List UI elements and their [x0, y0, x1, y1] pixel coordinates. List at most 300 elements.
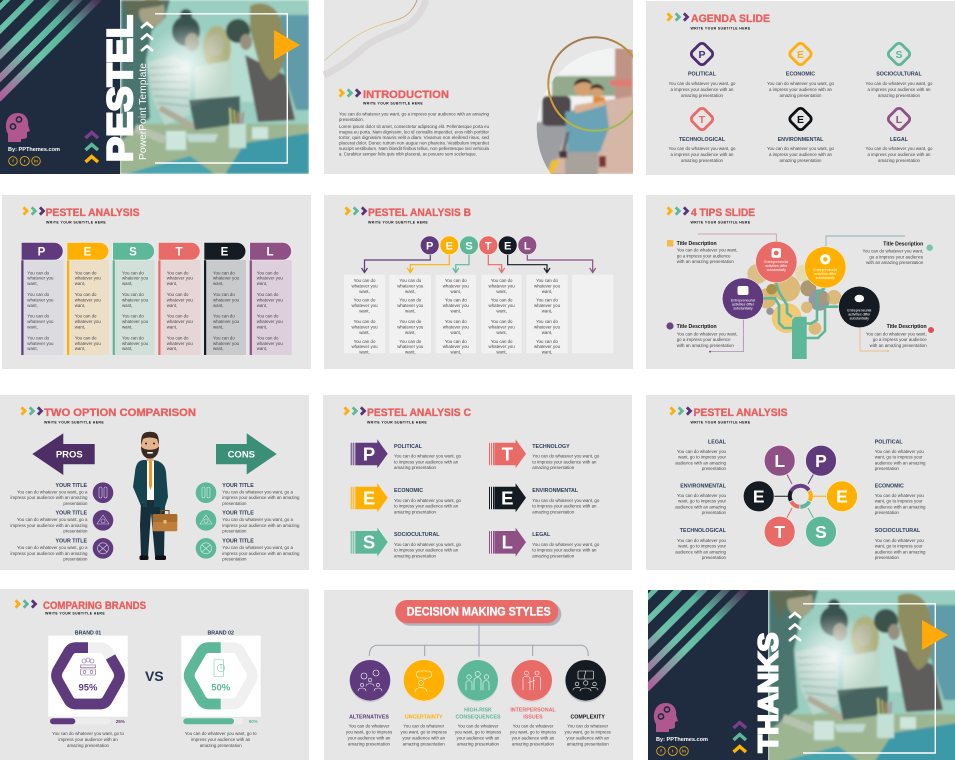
subtitle: WRITE YOUR SUBTITLE HERE	[690, 420, 751, 424]
column P: whatever you	[27, 276, 54, 281]
text cards: You can do	[491, 298, 513, 302]
style: interpersonal issues: amazing presentation	[512, 742, 555, 747]
icon: chevrons	[668, 207, 688, 215]
column S: whatever you	[122, 341, 149, 346]
arrow item: political: P	[363, 443, 375, 464]
column L: You can do	[257, 292, 279, 297]
title: TWO OPTION COMPARISON	[44, 407, 196, 419]
column E environmental: E	[221, 246, 229, 258]
icon: chevrons	[670, 407, 690, 415]
title: 4 TIPS SLIDE	[691, 207, 755, 219]
text cards: want,	[451, 289, 461, 294]
column E environmental: You can do	[213, 292, 235, 297]
icon: chevrons	[22, 407, 42, 415]
tip text: top right: You can do whatever you want,	[862, 249, 923, 254]
tip text: bottom left: You can do whatever you want,	[677, 331, 738, 336]
style: high-risk consequences: HIGH-RISK	[464, 707, 492, 713]
pros items	[10, 482, 113, 562]
column P: You can do	[27, 314, 50, 319]
column E environmental: whatever you	[213, 297, 240, 302]
column T: whatever you	[167, 297, 193, 302]
text cards: whatever you	[489, 344, 515, 349]
text cards: want,	[405, 330, 416, 335]
item: political: amazing presentation	[681, 93, 724, 98]
tip circle: coral: activities differ	[765, 264, 788, 268]
text cards: want,	[405, 308, 416, 313]
brand 02 description: impress your audience with an	[191, 737, 251, 742]
item: political: POLITICAL	[688, 71, 717, 77]
column L: You can do	[257, 335, 279, 340]
column L: want,	[257, 281, 267, 286]
column P: You can do	[27, 335, 50, 340]
column S: You can do	[122, 292, 144, 297]
column P: whatever you	[27, 297, 54, 302]
cons items: You can do whatever you want, go a	[222, 517, 293, 522]
column P: want,	[27, 346, 38, 351]
column L: whatever you	[257, 276, 283, 281]
left labels: You can do whatever you	[677, 538, 727, 543]
panel: 4 tips slide	[646, 195, 955, 369]
text cards: You can do	[354, 298, 376, 302]
item: environmental: You can do whatever you want, go	[767, 146, 835, 151]
panel: decision making styles	[324, 590, 633, 760]
letters: P	[426, 240, 433, 252]
connector tree	[369, 623, 588, 657]
item: environmental: amazing presentation	[780, 158, 822, 163]
arrow item: technology: amazing presentation	[532, 465, 575, 470]
title: PESTEL ANALYSIS B	[368, 207, 471, 219]
text cards: whatever you	[351, 324, 378, 329]
text cards: want,	[451, 330, 461, 335]
cons items	[196, 482, 300, 562]
style: high-risk consequences: you want, go to impress	[455, 730, 502, 735]
body text: presentation.	[339, 117, 364, 122]
tip text: bottom right: with an amazing presentation	[870, 343, 927, 348]
item: environmental: a impress your audience with an	[769, 152, 833, 157]
progress bar: brand 02: 90%	[249, 719, 258, 724]
letters: E	[504, 240, 511, 252]
right labels: audience with an amazing	[875, 549, 926, 554]
panel: PESTEL analysis B	[324, 195, 633, 369]
text cards: You can do	[445, 319, 467, 324]
text cards: whatever you	[489, 303, 515, 308]
radial diagram	[743, 445, 857, 547]
pros items: You can do whatever you want, go a	[17, 489, 88, 494]
brand 02 card: BRAND 02	[207, 630, 234, 636]
column E: want,	[75, 346, 85, 351]
subtitle: WRITE YOUR SUBTITLE HERE	[46, 220, 106, 224]
pros items: YOUR TITLE	[56, 483, 87, 489]
tip text: bottom right	[866, 324, 934, 348]
right labels: You can do whatever you	[875, 538, 924, 543]
pros items: YOUR TITLE	[56, 538, 87, 544]
column E	[67, 242, 109, 355]
column E: whatever you	[75, 276, 101, 281]
column L: L	[266, 246, 274, 258]
style: alternatives: ALTERNATIVES	[349, 714, 389, 720]
arrow item: economic: You can do whatever you want, go	[394, 498, 462, 503]
left labels: TECHNOLOGICAL	[680, 528, 727, 534]
arrow item: environmental: ENVIRONMENTAL	[532, 488, 579, 494]
item: economic	[767, 42, 835, 98]
panel: agenda slide	[646, 1, 955, 175]
pros items: You can do whatever you want, go a	[17, 517, 88, 522]
arrow item: economic: amazing presentation	[394, 509, 437, 514]
left labels: audience with an amazing	[675, 504, 727, 509]
title: COMPARING BRANDS	[43, 600, 146, 612]
arrow item: legal: amazing presentation	[532, 553, 575, 558]
brand 02 description: amazing presentation	[200, 743, 242, 748]
subtitle: WRITE YOUR SUBTITLE HERE	[690, 26, 751, 30]
radial diagram: T	[774, 522, 785, 542]
text cards: You can do	[354, 319, 376, 324]
pros items: impress your audience with an amazing	[10, 495, 88, 500]
subtitle: WRITE YOUR SUBTITLE HERE	[367, 420, 427, 424]
progress bar: brand 01: 25%	[116, 719, 125, 724]
column E: whatever you	[75, 341, 101, 346]
item: sociocultural: You can do whatever you want, go	[866, 81, 933, 86]
right labels: presentation	[875, 555, 899, 560]
arrow: pros: PROS	[56, 449, 83, 460]
text cards: whatever you	[443, 324, 469, 329]
style: interpersonal issues: you want, go to impress	[510, 730, 557, 735]
item: legal: amazing presentation	[878, 158, 921, 163]
column P: whatever you	[27, 319, 54, 324]
ring	[548, 37, 642, 131]
left labels: ENVIRONMENTAL	[680, 484, 727, 490]
cons items: You can do whatever you want, go a	[222, 545, 293, 550]
tip text: top left: go a impress your audience	[677, 253, 731, 258]
text cards: You can do	[536, 298, 558, 302]
pros items: impress your audience with an amazing	[10, 551, 88, 556]
text cards: whatever you	[534, 344, 561, 349]
column S	[113, 242, 155, 355]
column L: want,	[257, 346, 267, 351]
panel: thanks slide	[646, 587, 955, 760]
arrow item: political: to impress your audience with an	[394, 459, 459, 464]
text cards: whatever you	[489, 324, 515, 329]
column E: want,	[75, 281, 85, 286]
cons items: presentation	[222, 557, 247, 562]
cons items: You can do whatever you want, go a	[222, 489, 293, 494]
tip circle: purple	[722, 278, 764, 319]
icon: chevrons	[346, 207, 366, 215]
style: alternatives: You can do whatever	[349, 724, 390, 729]
right labels: You can do whatever you	[875, 493, 924, 498]
arrow item: technology: You can do whatever you want, go	[532, 454, 600, 459]
tip text: bottom right: You can do whatever you want,	[866, 331, 927, 336]
text cards: whatever you	[351, 303, 378, 308]
style: uncertainty: You can do whatever	[403, 724, 445, 729]
column T: want,	[167, 324, 177, 330]
tip circle: yellow: activities differ	[814, 272, 837, 276]
arrow: cons	[216, 433, 277, 474]
style: interpersonal issues	[510, 660, 557, 747]
item: technological: amazing presentation	[681, 158, 724, 163]
arrow: cons: CONS	[228, 449, 255, 460]
column L: whatever you	[257, 319, 283, 324]
social icons	[12, 159, 38, 164]
brand 01 description: You can do whatever you want, go to	[52, 731, 124, 736]
column P: whatever you	[27, 341, 54, 346]
subtitle: WRITE YOUR SUBTITLE HERE	[363, 102, 423, 106]
text cards: want,	[359, 330, 370, 335]
column T	[158, 242, 200, 355]
column P	[21, 242, 63, 355]
text cards: want,	[451, 308, 461, 313]
cons items: impress your audience with an amazing	[222, 495, 300, 500]
brand 01 description: impress your audience with an	[58, 737, 118, 742]
item: sociocultural: SOCIOCULTURAL	[876, 71, 923, 77]
letters: T	[485, 240, 492, 252]
column E environmental: want,	[213, 346, 224, 351]
tip circle: coral	[756, 241, 797, 283]
text cards: You can do	[399, 298, 422, 302]
style: complexity: you want, go to impress	[565, 730, 612, 735]
item: environmental: ENVIRONMENTAL	[778, 137, 824, 143]
arrow item: political	[351, 439, 462, 470]
column P: P	[38, 246, 46, 258]
title: AGENDA SLIDE	[691, 13, 770, 25]
text cards: whatever you	[397, 344, 424, 349]
item: environmental	[767, 107, 835, 163]
letters: L	[524, 240, 531, 252]
letters: S	[465, 240, 473, 252]
text cards: whatever you	[397, 283, 424, 288]
item: sociocultural	[866, 42, 933, 98]
column P: want,	[27, 324, 38, 330]
arrow item: political: amazing presentation	[394, 465, 437, 470]
progress bar: brand 01	[50, 718, 125, 724]
tip text: bottom left: with an amazing presentation	[677, 343, 734, 348]
column E environmental: whatever you	[213, 276, 240, 281]
left labels: want, go to impress your	[678, 455, 727, 460]
right labels: presentation	[875, 510, 899, 515]
arrow item: sociocultural: S	[363, 532, 375, 553]
right labels: audience with an amazing	[875, 504, 926, 509]
left labels: presentation	[702, 466, 727, 471]
subtitle: PowerPoint Template: PowerPoint Template	[137, 63, 149, 160]
text cards: You can do	[445, 339, 467, 344]
text cards: whatever you	[351, 283, 378, 288]
radial diagram: L	[774, 451, 785, 471]
right labels: ECONOMIC	[875, 484, 904, 490]
illustration: businessman	[133, 432, 177, 560]
text cards: You can do	[491, 339, 513, 344]
panel: PESTEL analysis C	[323, 395, 632, 570]
subtitle: WRITE YOUR SUBTITLE HERE	[45, 611, 105, 615]
photo: father and child	[536, 36, 633, 174]
text cards: You can do	[536, 319, 558, 324]
text cards: You can do	[354, 278, 376, 283]
column S: You can do	[122, 270, 144, 275]
title: PESTEL ANALYSIS C	[367, 407, 471, 419]
tip text: top right: Title Description	[883, 241, 923, 247]
column E environmental: want,	[213, 303, 224, 308]
arrow item: environmental: E	[501, 487, 513, 508]
tip text: top left: Title Description	[677, 241, 717, 247]
arrow item: legal: You can do whatever you want, go	[532, 542, 600, 547]
column S: want,	[122, 324, 132, 330]
panel: introduction slide	[324, 0, 642, 180]
text cards: want,	[496, 289, 507, 294]
arrow item: technology: TECHNOLOGY	[532, 444, 570, 450]
social icons: in	[34, 159, 38, 164]
right labels: want, go to impress your	[875, 544, 923, 549]
body text: placerat dolor. Donec rutrum non augue non pharetra. Vestibulum imperdiet	[339, 140, 490, 145]
item: technological: a impress your audience with an	[671, 152, 734, 157]
style: complexity: You can do whatever	[567, 724, 609, 729]
title: INTRODUCTION	[363, 89, 449, 101]
body text: tortor, quis dignissim mauris velit a diam. Vivamus non eleifend risus, sed	[339, 135, 490, 140]
column P: want,	[27, 303, 38, 308]
social icons: t	[24, 159, 26, 164]
pros items: presentation	[63, 501, 88, 506]
tip circle: purple: activities differ	[732, 303, 755, 307]
style: interpersonal issues: ISSUES	[523, 714, 543, 720]
radial diagram: E	[836, 487, 848, 507]
social icons: f	[12, 159, 14, 164]
style: interpersonal issues: your audience with an	[512, 736, 555, 741]
text cards: want,	[359, 350, 370, 355]
style: complexity: COMPLEXITY	[570, 714, 605, 720]
style: interpersonal issues: INTERPERSONAL	[510, 707, 556, 713]
arrow item: environmental	[489, 483, 600, 514]
style: uncertainty: amazing presentation	[403, 742, 445, 747]
column L: want,	[257, 303, 267, 308]
style: alternatives: you want, go to impress	[346, 730, 393, 735]
style: uncertainty	[401, 660, 448, 747]
panel: PESTEL analysis columns	[2, 195, 311, 369]
brand 01 description: amazing presentation	[67, 743, 110, 748]
column S: whatever you	[122, 297, 149, 302]
title: PESTEL: PESTEL	[101, 15, 140, 162]
column E environmental: You can do	[213, 270, 235, 275]
arrow item: environmental: amazing presentation	[532, 509, 575, 514]
tip circle: yellow: Entrepreneurial	[813, 268, 837, 272]
item: technological	[669, 107, 736, 163]
tip circle: coral: Entrepreneurial	[764, 260, 788, 264]
arrow item: sociocultural: amazing presentation	[394, 553, 437, 558]
item: legal: LEGAL	[890, 137, 909, 143]
text cards: whatever you	[397, 303, 424, 308]
column T: You can do	[167, 335, 189, 340]
arrow item: technology	[489, 439, 600, 470]
text cards: whatever you	[443, 303, 469, 308]
style: complexity	[565, 660, 612, 747]
column T: You can do	[167, 270, 189, 275]
text cards: want,	[542, 330, 552, 335]
icon: chevrons	[340, 89, 360, 97]
cons items: presentation	[222, 501, 247, 506]
item: sociocultural: a impress your audience with an	[868, 87, 931, 92]
text cards: want,	[359, 289, 370, 294]
arrow item: sociocultural	[351, 528, 462, 558]
title: PESTEL ANALYSIS	[694, 407, 788, 419]
tip text: bottom right: go a impress your audience	[873, 337, 927, 342]
brand 02 description: You can do whatever you want, go to	[185, 731, 257, 736]
column T: whatever you	[167, 341, 193, 346]
tree graphic	[747, 264, 841, 359]
body text: magna eu porta. Nam dignissim, leo id convallis imperdiet, eros nibh porttitor	[339, 129, 490, 134]
tip circle: black: Entrepreneurial	[847, 308, 871, 312]
left labels: LEGAL	[708, 440, 727, 446]
radial diagram: E	[753, 487, 765, 507]
item: economic: a impress your audience with an	[769, 87, 833, 92]
icon: chevrons	[16, 600, 36, 608]
right labels: SOCIOCULTURAL	[875, 528, 921, 534]
item: technological: TECHNOLOGICAL	[679, 137, 726, 143]
tip text: top left: with an amazing presentation	[677, 259, 734, 264]
pros items: impress your audience with an amazing	[10, 523, 88, 528]
social icons: t	[672, 749, 674, 754]
tip circle: black: substantially	[850, 316, 869, 320]
column E: want,	[75, 303, 85, 308]
arrow item: legal: LEGAL	[532, 532, 551, 538]
item: political	[669, 42, 736, 98]
column E environmental: You can do	[213, 335, 235, 340]
item: political: a impress your audience with an	[671, 87, 734, 92]
tip circle: black: activities differ	[848, 312, 871, 316]
item: economic: amazing presentation	[780, 93, 822, 98]
column L: whatever you	[257, 297, 283, 302]
panel: two option comparison	[0, 395, 309, 570]
column L: You can do	[257, 314, 279, 319]
radial diagram: S	[815, 522, 827, 542]
column E environmental: want,	[213, 324, 224, 330]
tip circle: yellow	[805, 247, 846, 288]
tip text: top left	[667, 240, 738, 264]
progress bar: brand 02	[183, 718, 258, 724]
column S: You can do	[122, 335, 144, 340]
heading pill	[395, 600, 561, 626]
column E: You can do	[75, 292, 97, 297]
arrows from letters to cards	[362, 252, 596, 272]
brand 01 card	[48, 630, 128, 717]
title: PESTEL ANALYSIS	[46, 207, 140, 219]
tip text: top right	[862, 241, 933, 265]
arrow item: environmental: to impress your audience with an	[532, 504, 597, 509]
leader lines	[698, 234, 905, 353]
column E: E	[84, 246, 92, 258]
tip text: top left: You can do whatever you want,	[677, 248, 738, 253]
column E environmental: You can do	[213, 314, 235, 319]
right labels: presentation	[875, 466, 899, 471]
arrow item: technology: to impress your audience with an	[532, 459, 597, 464]
column E environmental: want,	[213, 281, 224, 286]
pros items: presentation	[63, 529, 88, 534]
style: uncertainty: you want, go to impress	[401, 730, 448, 735]
text cards: want,	[542, 289, 552, 294]
body text: Lorem ipsum dolor sit amet, consectetur adipiscing elit. Pellentesque porta eu	[339, 124, 490, 129]
style: alternatives	[346, 660, 393, 747]
item: political: P	[698, 49, 706, 61]
arrow item: environmental: You can do whatever you want, go	[532, 498, 600, 503]
column S: want,	[122, 281, 132, 286]
style: complexity: your audience with an	[566, 736, 610, 741]
letters	[426, 240, 531, 252]
column E environmental: whatever you	[213, 341, 240, 346]
cons items: YOUR TITLE	[222, 511, 254, 517]
text cards: You can do	[445, 278, 467, 283]
text cards: want,	[496, 308, 507, 313]
item: economic: E	[797, 49, 804, 61]
arrow item: economic: ECONOMIC	[394, 488, 423, 494]
heading pill: DECISION MAKING STYLES	[407, 604, 551, 618]
body text: You can do whatever you want, go a impress your audience with an amazing	[339, 111, 490, 116]
text cards: want,	[496, 330, 507, 335]
panel: comparing brands	[0, 589, 309, 760]
